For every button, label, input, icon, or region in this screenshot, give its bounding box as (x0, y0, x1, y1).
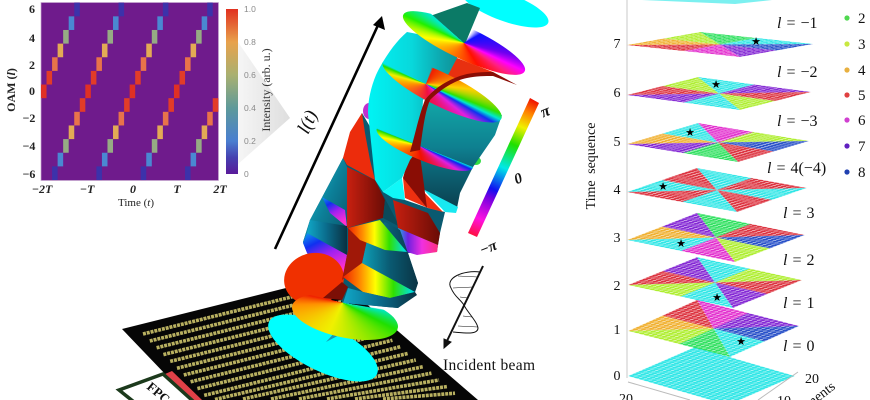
lower right body (416, 98, 502, 208)
layer 4 (627, 168, 807, 212)
helix backing silhouette (303, 113, 445, 308)
3D helical phase wavefront (259, 0, 553, 395)
bottom axis labels: 20 (805, 372, 819, 387)
colour scale ticks: 1.0 (244, 4, 256, 14)
star markers: ★ (736, 335, 746, 348)
right magenta wedge (398, 228, 438, 255)
layer labels: l = −3 (777, 113, 818, 130)
y axis tick labels: 4 (29, 31, 35, 45)
label: minus pi: −π (477, 237, 500, 259)
cyan edge strip (423, 189, 458, 213)
star markers: ★ (751, 35, 761, 48)
bottom cyan disc (259, 301, 387, 395)
layer 7 (627, 32, 813, 57)
x axis tick labels: −T (80, 182, 95, 196)
star markers: ★ (711, 78, 721, 91)
red disc (280, 248, 348, 310)
x axis title: Time (t) (118, 197, 154, 209)
upper blue-magenta stripe (322, 197, 347, 227)
x axis tick labels: 0 (130, 182, 136, 196)
layer labels: l = −2 (777, 64, 818, 81)
green tip behind body (471, 157, 481, 165)
colour scale ticks (244, 4, 256, 179)
label: incident beam: Incident beam (443, 357, 535, 374)
layer 6 (627, 77, 811, 110)
star markers: ★ (712, 291, 722, 304)
FPC connector strip (165, 371, 202, 400)
layer labels: l = −1 (777, 15, 818, 32)
cyan body (368, 32, 465, 192)
legend: 8 (858, 165, 866, 181)
layer labels: l = 0 (783, 338, 814, 355)
star markers (658, 35, 761, 348)
legend: 3 (858, 37, 866, 53)
layer index numbers: 7 (614, 37, 620, 52)
layer labels: l = 3 (783, 205, 814, 222)
layer labels: l = 1 (783, 295, 814, 312)
layer index numbers: 4 (614, 183, 620, 198)
star markers: ★ (676, 237, 686, 250)
callout: gray zoom triangle (237, 42, 290, 165)
layer 1 (628, 300, 799, 357)
y axis tick labels: 0 (29, 84, 35, 98)
heatmap background (41, 2, 218, 180)
layer index numbers: 1 (614, 323, 620, 338)
lower fan (343, 263, 415, 298)
dark red column (347, 167, 385, 228)
vertical axis (626, 0, 628, 378)
layer index numbers: 5 (614, 135, 620, 150)
legend: 4 (858, 63, 866, 79)
top cyan disc (457, 0, 553, 36)
y axis title: OAM (l) (4, 68, 18, 112)
rainbow disc three (372, 116, 478, 180)
layer 2 (628, 257, 802, 308)
bottom axes (628, 372, 798, 400)
panel: time sequence layers (584, 0, 838, 400)
upper fan (348, 220, 407, 252)
colour scale ticks: 0.6 (244, 70, 256, 80)
layer 0 (628, 347, 795, 400)
colour scale ticks: 0.8 (244, 37, 256, 47)
axis title: Time sequence (584, 123, 599, 209)
lower blue-magenta stripe (303, 233, 347, 277)
y axis tick labels: 2 (29, 58, 35, 72)
arrow: incident beam with wave (444, 266, 483, 348)
dark green cone (430, 3, 480, 44)
y axis tick labels: −6 (23, 167, 35, 181)
colour scale ticks: 0.2 (244, 136, 256, 146)
colour scale ticks: 0.4 (244, 103, 256, 113)
x axis tick labels: 2T (212, 182, 227, 196)
heatmap cells (41, 3, 218, 180)
arrow: l(t) direction (275, 16, 385, 249)
star markers: ★ (685, 126, 695, 139)
colour scale (226, 9, 238, 174)
layer index numbers: 0 (614, 369, 620, 384)
label: l(t): l(t) (293, 107, 322, 137)
layer 8 tip (642, 0, 772, 4)
x axis tick labels (32, 182, 227, 196)
layer 5 (627, 123, 809, 162)
colour scale title: Intensity (arb. u.) (259, 48, 273, 132)
cone right teal (362, 222, 418, 292)
layer index numbers: 2 (614, 279, 620, 294)
legend: 5 (858, 88, 866, 104)
y axis tick labels: −4 (23, 139, 35, 153)
bottom rainbow disc (288, 286, 402, 348)
FPC label box (119, 374, 194, 400)
y axis tick labels: −2 (23, 111, 35, 125)
y axis tick labels (23, 2, 35, 181)
bottom axis labels (619, 372, 838, 400)
label: zero: 0 (512, 170, 525, 188)
layer 3 (627, 213, 805, 262)
x axis tick labels: −2T (32, 182, 53, 196)
dark band on left body (307, 220, 347, 255)
phase colour bar (468, 98, 554, 259)
chip: metasurface board (119, 276, 478, 400)
label: pi: π (538, 102, 554, 121)
red flame (343, 113, 375, 180)
right dark red wedge (393, 200, 440, 245)
layer index numbers: 3 (614, 231, 620, 246)
layer index numbers (614, 37, 620, 384)
bright cyan triangle (383, 178, 405, 200)
y axis tick labels: 6 (29, 2, 35, 16)
legend: 6 (858, 113, 866, 129)
colour scale ticks: 0 (244, 169, 249, 179)
layer labels (767, 15, 826, 355)
x axis tick labels: T (173, 182, 181, 196)
legend: 2 (858, 11, 866, 27)
layer labels: l = 2 (783, 252, 814, 269)
small magenta arc (363, 103, 375, 119)
rainbow disc one (396, 0, 532, 86)
layer index numbers: 6 (614, 86, 620, 101)
teal spike (326, 330, 345, 342)
dark red ribbon (410, 72, 517, 152)
legend: 7 (858, 139, 866, 155)
dark red triangle (403, 153, 427, 208)
legend (844, 11, 866, 181)
gold element rows (143, 287, 455, 400)
dark teal sliver (382, 193, 400, 227)
left lower body (303, 158, 347, 258)
star markers: ★ (658, 180, 668, 193)
upper dark red column (342, 228, 367, 280)
red lower strip (403, 178, 443, 212)
layer labels: l = 4(−4) (767, 160, 826, 177)
rainbow disc two (375, 46, 509, 134)
lower body band (343, 288, 417, 308)
panel: OAM time heatmap (4, 2, 290, 209)
red band under top disc (432, 58, 493, 92)
dark red sliver (323, 282, 348, 300)
